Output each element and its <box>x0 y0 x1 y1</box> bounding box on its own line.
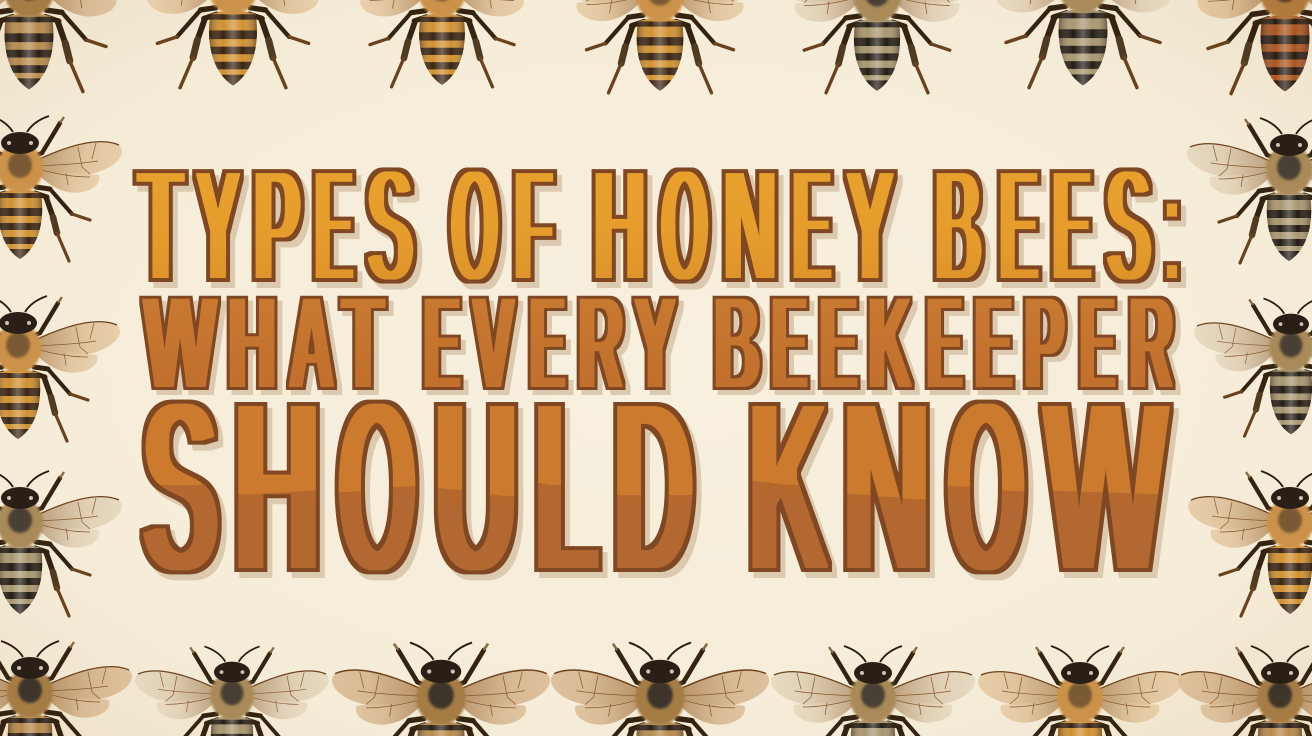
title line 2: V <box>473 267 514 420</box>
title line 3: N <box>843 347 930 626</box>
title line 1: O <box>661 133 708 319</box>
bottom row of bees <box>0 641 1312 736</box>
text: R <box>1130 267 1173 420</box>
title line 1: N <box>724 133 776 319</box>
title line 1: E <box>1000 133 1038 319</box>
title line 1 <box>139 133 1177 319</box>
title line 2: P <box>1025 267 1064 420</box>
bee: bottom 1 <box>0 641 132 736</box>
title line 2: K <box>869 267 912 420</box>
title line 1: P <box>254 133 300 319</box>
bee: top 2 <box>123 0 343 88</box>
bee: top 4 <box>553 0 767 93</box>
bee: top 5 <box>771 0 983 93</box>
title line 3: O <box>338 347 416 626</box>
title line 3: K <box>749 347 830 626</box>
title line 1: B <box>935 133 982 319</box>
title line 2 <box>144 267 1173 420</box>
title line 2: Y <box>634 267 676 420</box>
title line 1: S <box>367 133 413 319</box>
title line 1: E <box>315 133 353 319</box>
title line 2: W <box>144 267 217 420</box>
title line 2: E <box>927 267 962 420</box>
bee: top 7 <box>1173 0 1312 94</box>
title line 1: O <box>451 133 498 319</box>
bee: left 3 <box>0 471 122 616</box>
title line 3: U <box>435 347 517 626</box>
bee: bottom 7 <box>1178 646 1312 736</box>
title line 3: H <box>234 347 320 626</box>
bee: right 3 <box>1188 471 1312 616</box>
title line 3: S <box>142 347 218 626</box>
title line 2: H <box>228 267 276 420</box>
title line 1: H <box>594 133 645 319</box>
title line 1: E <box>793 133 831 319</box>
bee: top 3 <box>337 0 547 87</box>
title line 3: W <box>1044 347 1168 626</box>
bee: top 6 <box>971 0 1195 88</box>
title line 1: S <box>1106 133 1151 319</box>
title line 2: R <box>578 267 623 420</box>
title line 3 <box>142 347 1168 626</box>
title line 2: E <box>424 267 460 420</box>
bee: right 1 <box>1187 118 1312 263</box>
title line 2: E <box>530 267 564 420</box>
bee: right 2 <box>1194 298 1312 436</box>
title line 2: A <box>289 267 334 420</box>
title line 3: O <box>948 347 1025 626</box>
bee: top 1 <box>0 0 141 92</box>
title line 1: T <box>139 133 183 319</box>
bee: left 2 <box>0 296 120 441</box>
bee: bottom 3 <box>332 643 550 736</box>
bee: bottom 5 <box>771 646 975 736</box>
title line 2: E <box>772 267 806 420</box>
title <box>139 133 1177 626</box>
top row of bees <box>0 0 1312 94</box>
bee: bottom 2 <box>135 646 329 736</box>
left column of bees <box>0 116 122 616</box>
title line 2: E <box>820 267 857 420</box>
bee: bottom 6 <box>978 646 1182 736</box>
title line 2: E <box>975 267 1012 420</box>
title line 2: T <box>343 267 383 420</box>
title line 1: E <box>1053 133 1091 319</box>
title line 2: B <box>714 267 760 420</box>
text: : <box>1167 133 1177 319</box>
right column of bees <box>1187 118 1312 616</box>
title line 1: F <box>514 133 552 319</box>
title line 2: E <box>1080 267 1114 420</box>
title line 3: L <box>535 347 598 626</box>
title line 1: Y <box>845 133 895 319</box>
title line 1: Y <box>195 133 241 319</box>
title line 3: D <box>614 347 693 626</box>
bee: left 1 <box>0 116 122 261</box>
bee: bottom 4 <box>551 643 769 736</box>
